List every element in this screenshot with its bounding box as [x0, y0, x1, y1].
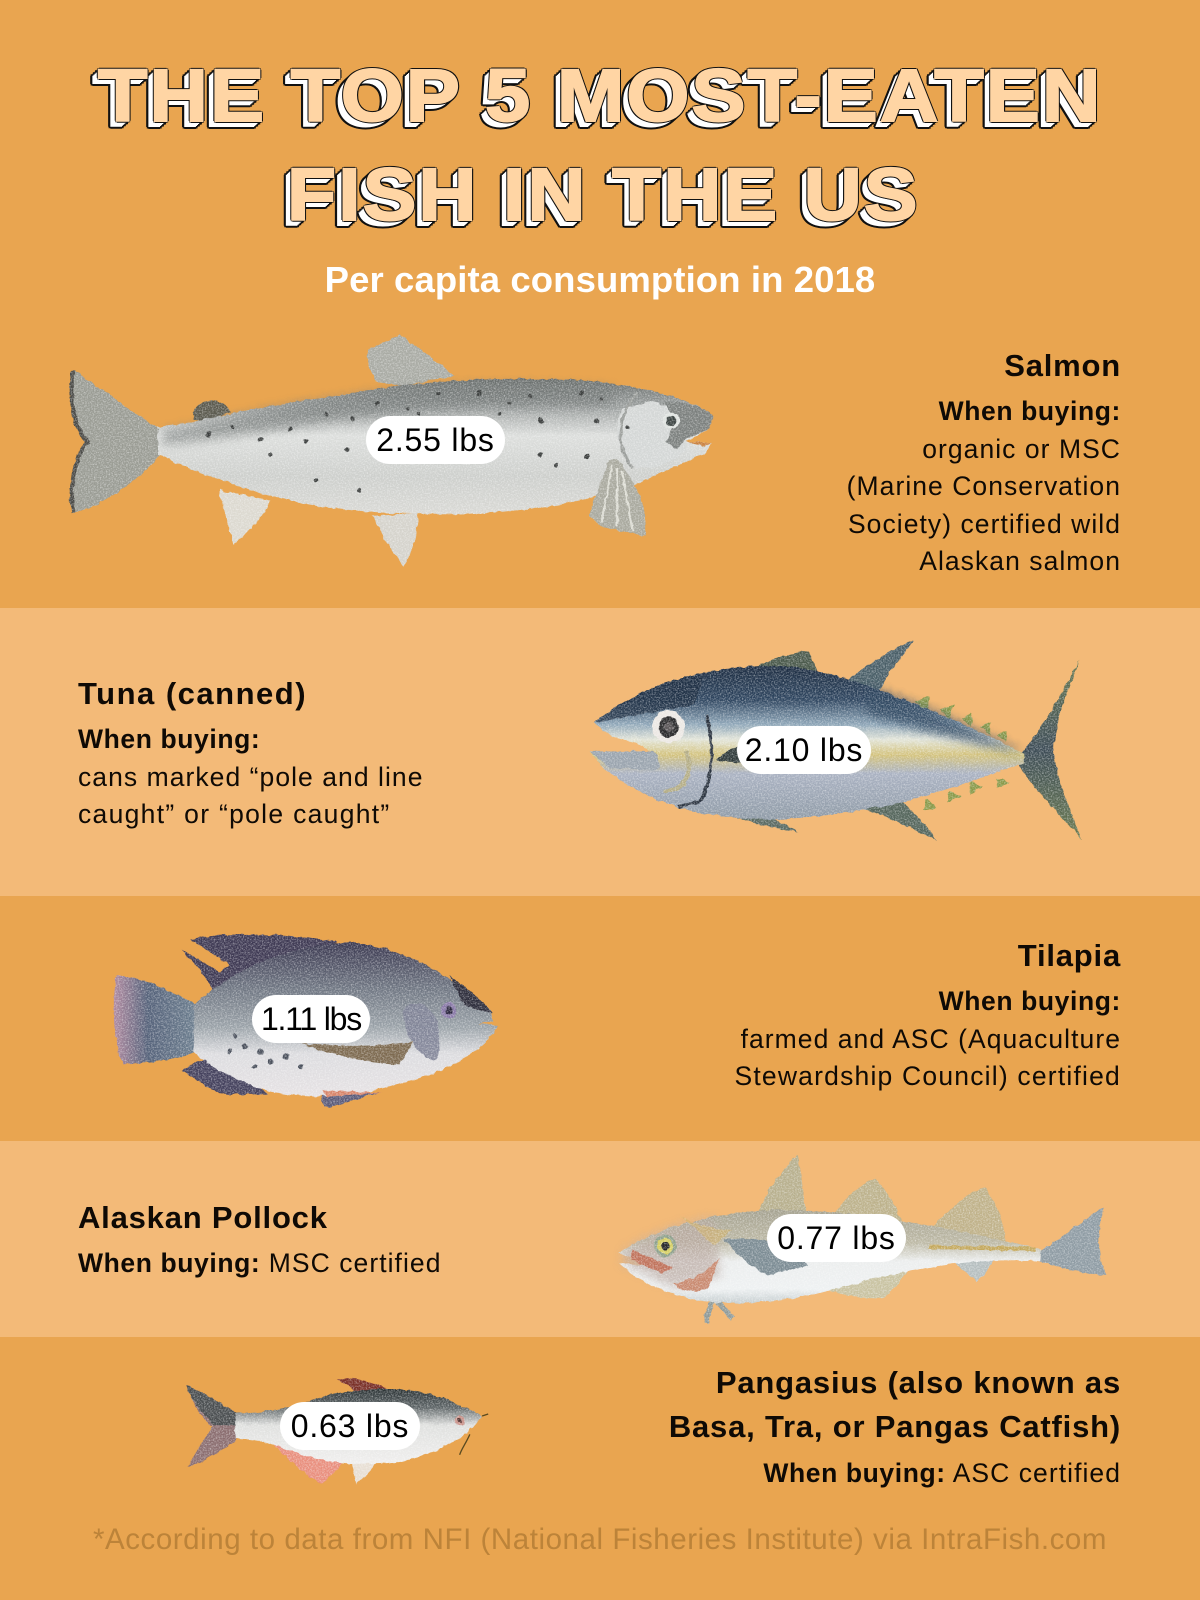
pill: pangasius 0.63 lbs: [280, 1402, 420, 1450]
illustration: pangasius: [186, 1378, 488, 1484]
footnote: *According to data from NFI (National Fisheries Institute) via IntraFish.com: [93, 1523, 1107, 1556]
text: salmon: Society) certified wild: [848, 508, 1121, 538]
pill: tuna 2.10 lbs: [737, 726, 871, 774]
pill: tuna 2.10 lbs: 2.10 lbs: [745, 732, 863, 768]
text: tilapia: When buying:: [939, 986, 1121, 1016]
pill: pollock 0.77 lbs: 0.77 lbs: [777, 1220, 896, 1256]
pill: pangasius 0.63 lbs: 0.63 lbs: [291, 1408, 409, 1444]
illustration: tuna: [590, 640, 1082, 840]
pill: tilapia 1.11 lbs: 1.11 lbs: [261, 1001, 361, 1037]
illustration: pollock: [618, 1155, 1106, 1324]
title: THE TOP 5 MOST-EATEN: [98, 54, 1103, 137]
text: tilapia: Stewardship Council) certified: [734, 1061, 1121, 1091]
name: tilapia: Tilapia: [1018, 938, 1121, 973]
text: pollock: When buying: MSC certified: [78, 1248, 441, 1278]
name: pangasius: Basa, Tra, or Pangas Catfish): [669, 1409, 1121, 1444]
text: tuna: [78, 676, 423, 829]
panel: salmon: [0, 320, 1200, 608]
name: pollock: Alaskan Pollock: [78, 1200, 328, 1235]
name: salmon: Salmon: [1004, 348, 1121, 383]
text: pangasius: [669, 1365, 1121, 1488]
text: salmon: Alaskan salmon: [919, 546, 1121, 576]
illustration: salmon: [68, 334, 714, 567]
text: tuna: caught” or “pole caught”: [78, 799, 391, 829]
pill: salmon 2.55 lbs: [366, 416, 505, 464]
text: pollock: [78, 1200, 441, 1278]
text: tilapia: farmed and ASC (Aquaculture: [741, 1024, 1121, 1054]
subtitle: Per capita consumption in 2018: [325, 259, 875, 300]
text: tilapia: [734, 938, 1121, 1091]
name: pangasius: [669, 1365, 1121, 1444]
text: tuna: When buying:: [78, 724, 260, 754]
panel: tilapia: [0, 896, 1200, 1141]
text: salmon: organic or MSC: [922, 434, 1121, 464]
text: salmon: [847, 348, 1121, 576]
panel: pangasius: [0, 1337, 1200, 1600]
name: pangasius: Pangasius (also known as: [716, 1365, 1121, 1400]
panel: tuna: [0, 608, 1200, 896]
text: salmon: When buying:: [939, 396, 1121, 426]
title: FISH IN THE US: [287, 153, 920, 236]
pill: pollock 0.77 lbs: [767, 1214, 906, 1262]
title: [90, 54, 1103, 236]
illustration: tilapia: [113, 934, 498, 1108]
panel: pollock: [0, 1141, 1200, 1337]
text: salmon: (Marine Conservation: [847, 471, 1121, 501]
text: tuna: cans marked “pole and line: [78, 762, 423, 792]
pill: tilapia 1.11 lbs: [252, 995, 370, 1043]
name: tuna: Tuna (canned): [78, 676, 307, 711]
pill: salmon 2.55 lbs: 2.55 lbs: [376, 422, 495, 458]
text: pangasius: When buying: ASC certified: [763, 1458, 1121, 1488]
